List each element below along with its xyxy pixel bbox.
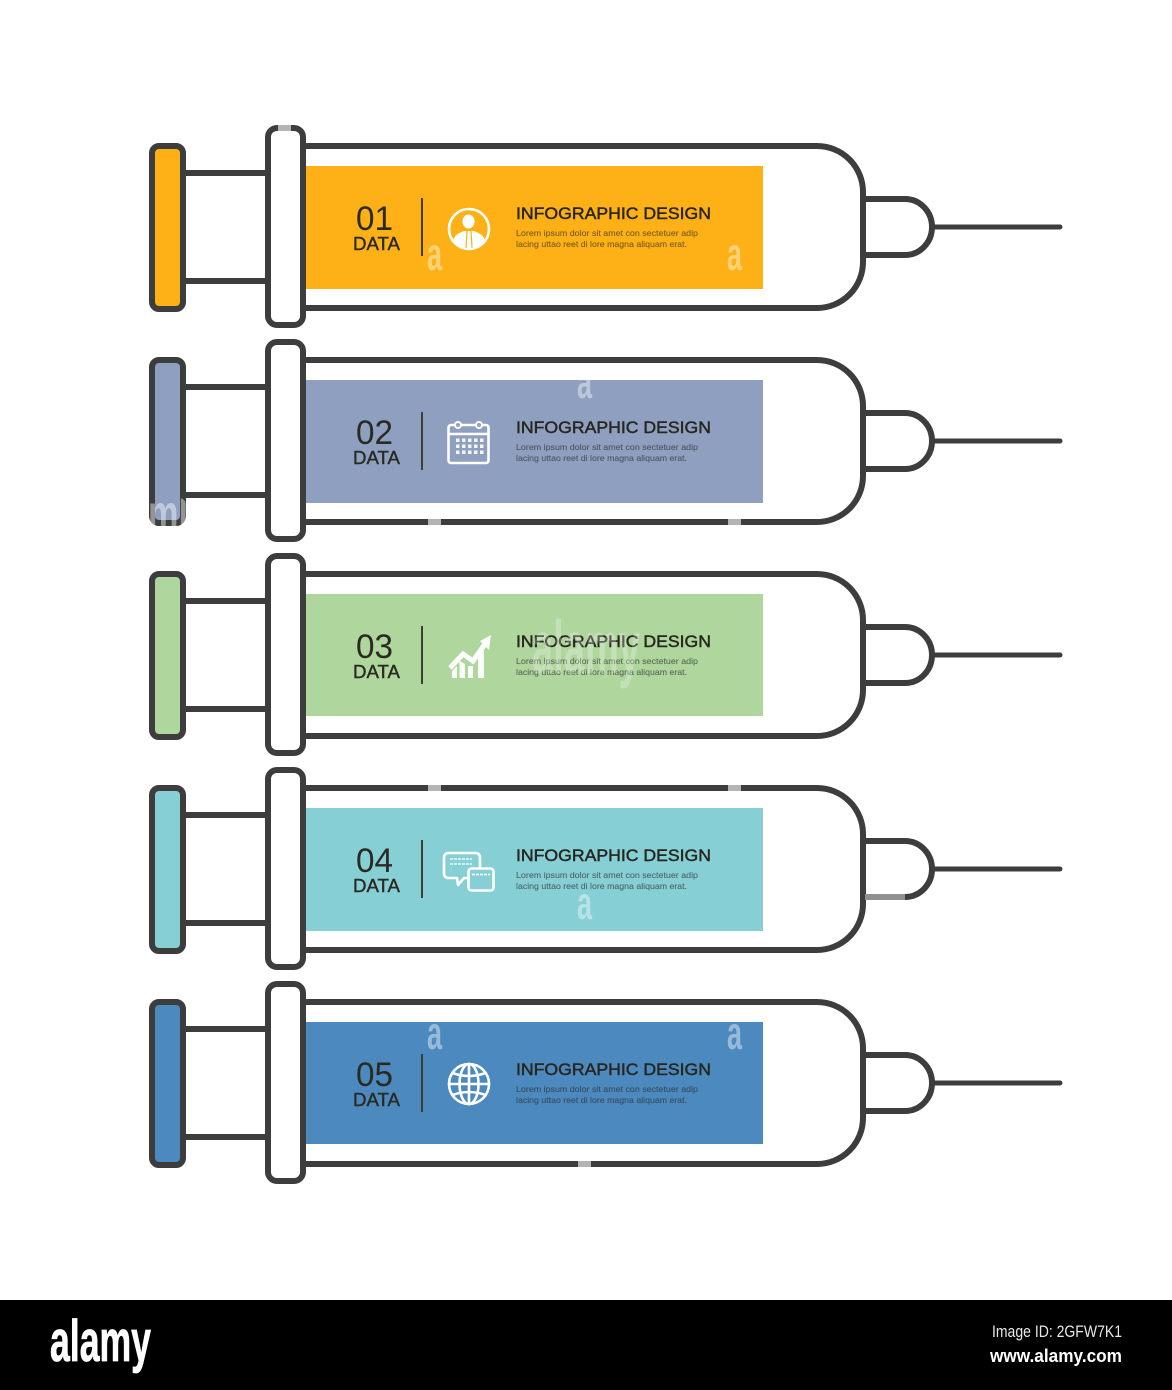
body text 05	[516, 1084, 698, 1105]
needle 03	[932, 652, 1060, 658]
body text 03	[516, 656, 698, 677]
needle tip 03	[863, 627, 932, 683]
divider 01	[421, 198, 423, 256]
flange 05	[268, 984, 303, 1181]
body text 04: Lorem ipsum dolor sit amet con sectetuer adip	[516, 870, 698, 880]
number 05: 05	[356, 1056, 393, 1094]
body text 05: Lorem ipsum dolor sit amet con sectetuer adip	[516, 1084, 698, 1094]
plunger rod 03	[183, 601, 270, 709]
body text 02: Lorem ipsum dolor sit amet con sectetuer adip	[516, 442, 698, 452]
divider 05	[421, 1054, 423, 1112]
needle 05	[932, 1080, 1060, 1086]
data label 03: DATA	[353, 662, 400, 682]
divider 02	[421, 412, 423, 470]
barrel 04	[300, 788, 863, 950]
body text 04	[516, 870, 698, 891]
number 02: 02	[356, 414, 393, 452]
barrel 02	[300, 360, 863, 522]
data label 02: DATA	[353, 448, 400, 468]
icon: calendar	[448, 422, 488, 463]
syringe 04	[152, 770, 1060, 967]
flange 02	[268, 342, 303, 539]
icon: person	[449, 209, 489, 249]
syringe 01	[152, 128, 1060, 325]
plunger rod 04	[183, 815, 270, 923]
website: www.alamy.com	[989, 1346, 1122, 1366]
needle 04	[932, 866, 1060, 872]
colour panel 05	[306, 1022, 763, 1144]
number 03: 03	[356, 628, 393, 666]
body text 01: lacing uttao reet di lore magna aliquam erat.	[516, 239, 687, 249]
flange 04	[268, 770, 303, 967]
barrel 03	[300, 574, 863, 736]
plunger rod 01	[183, 173, 270, 281]
body text 02: lacing uttao reet di lore magna aliquam erat.	[516, 453, 687, 463]
watermark marks: a	[427, 1007, 442, 1059]
footer bar	[0, 1300, 1172, 1390]
plunger rod 05	[183, 1029, 270, 1137]
body text 03: lacing uttao reet di lore magna aliquam erat.	[516, 667, 687, 677]
divider 04	[421, 840, 423, 898]
data label 01: DATA	[353, 234, 400, 254]
watermark marks: alamy	[532, 605, 640, 689]
icon: growth chart	[450, 635, 491, 678]
colour panel 02	[306, 380, 763, 503]
plunger cap 03	[152, 574, 183, 737]
plunger cap 05	[152, 1002, 183, 1165]
plunger cap 01	[152, 146, 183, 309]
body text 04: lacing uttao reet di lore magna aliquam erat.	[516, 881, 687, 891]
colour panel 01	[306, 166, 763, 289]
watermark marks: a	[577, 877, 592, 929]
barrel 05	[300, 1002, 863, 1164]
image id: Image ID: 2GFW7K1	[992, 1322, 1122, 1341]
barrel 01	[300, 146, 863, 308]
heading 04: INFOGRAPHIC DESIGN	[516, 846, 711, 865]
watermark marks: a	[727, 228, 742, 280]
number 01: 01	[356, 200, 393, 238]
needle tip 01	[863, 199, 932, 255]
heading 01: INFOGRAPHIC DESIGN	[516, 204, 711, 223]
syringe 03	[152, 556, 1060, 753]
flange 03	[268, 556, 303, 753]
data label 04: DATA	[353, 876, 400, 896]
syringe 05	[152, 984, 1060, 1181]
plunger cap 02	[152, 360, 183, 523]
needle tip 02	[863, 413, 932, 469]
heading 02: INFOGRAPHIC DESIGN	[516, 418, 711, 437]
needle tip 04	[863, 841, 932, 897]
watermark marks: a	[577, 356, 592, 408]
plunger rod 02	[183, 387, 270, 495]
watermark marks: a	[427, 228, 442, 280]
body text 03: Lorem ipsum dolor sit amet con sectetuer adip	[516, 656, 698, 666]
watermark marks: ml	[148, 485, 188, 541]
divider 03	[421, 626, 423, 684]
watermark marks	[148, 125, 905, 1167]
plunger cap 04	[152, 788, 183, 951]
icon: globe	[449, 1064, 489, 1104]
body text 05: lacing uttao reet di lore magna aliquam erat.	[516, 1095, 687, 1105]
heading 03: INFOGRAPHIC DESIGN	[516, 632, 711, 651]
needle 02	[932, 438, 1060, 444]
body text 01	[516, 228, 698, 249]
body text 01: Lorem ipsum dolor sit amet con sectetuer adip	[516, 228, 698, 238]
colour panel 04	[306, 808, 763, 931]
syringe 02	[152, 342, 1060, 539]
number 04: 04	[356, 842, 393, 880]
needle 01	[932, 224, 1060, 230]
needle tip 05	[863, 1055, 932, 1111]
flange 01	[268, 128, 303, 325]
watermark marks: a	[727, 1007, 742, 1059]
data label 05: DATA	[353, 1090, 400, 1110]
footer logo: alamy	[50, 1309, 151, 1374]
icon: chat bubbles	[444, 853, 494, 890]
body text 02	[516, 442, 698, 463]
heading 05: INFOGRAPHIC DESIGN	[516, 1060, 711, 1079]
colour panel 03	[306, 594, 763, 716]
